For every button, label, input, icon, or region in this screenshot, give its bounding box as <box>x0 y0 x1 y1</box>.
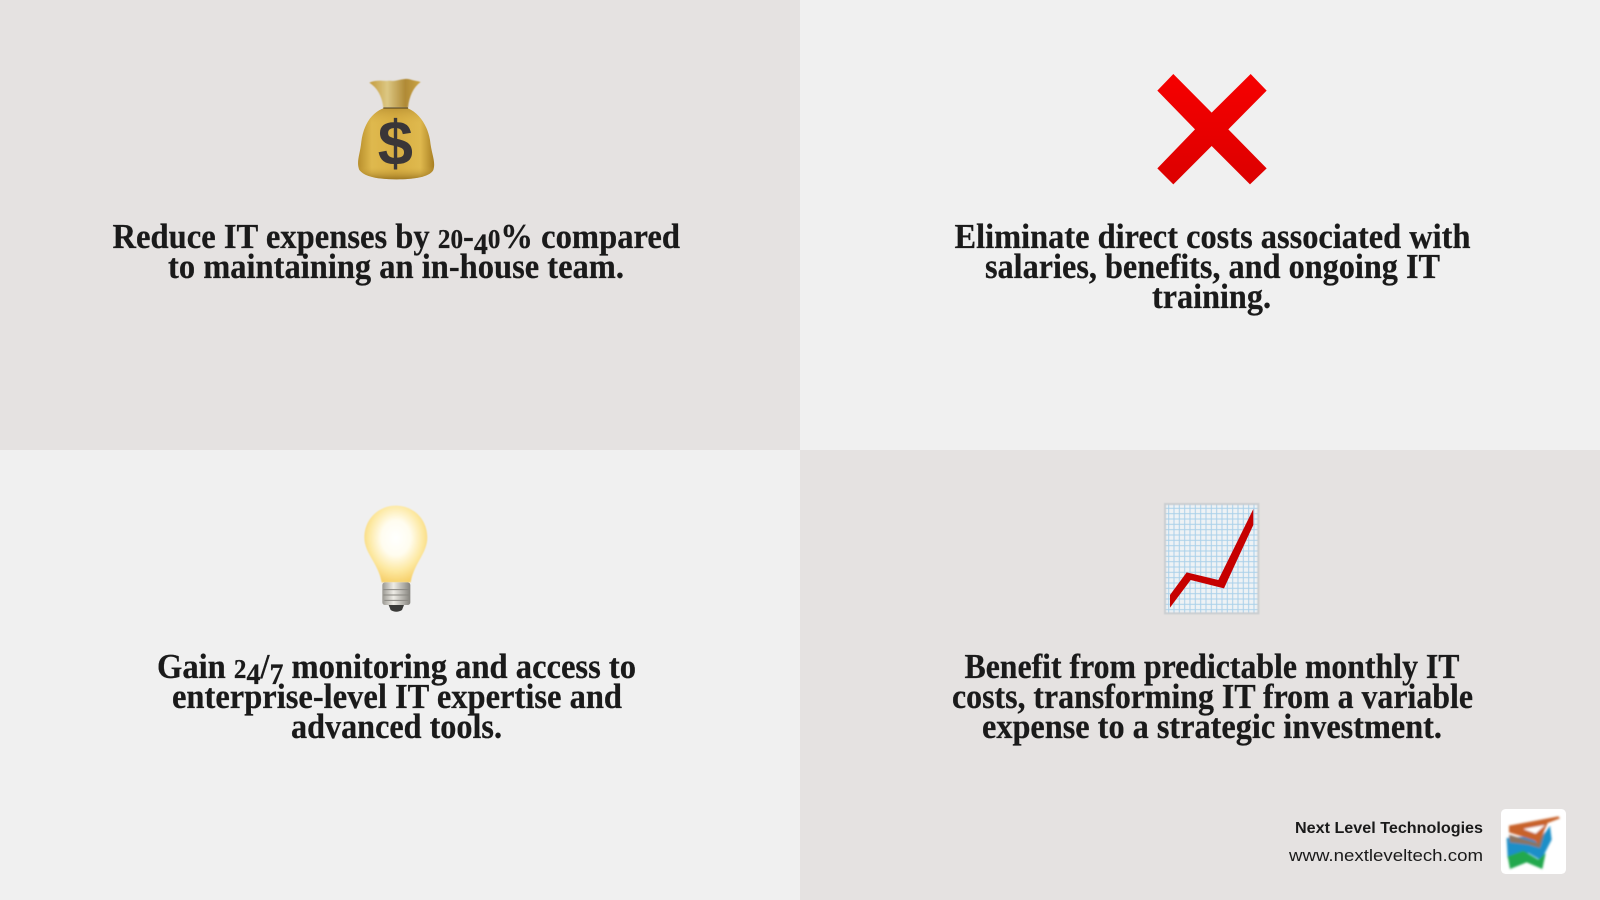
heading: monitoring text: / <box>259 647 271 686</box>
heading: predictable costs text <box>952 647 1473 746</box>
heading: monitoring text: advanced tools. <box>291 707 502 746</box>
heading: predictable costs text: expense to a strategic investment. <box>982 707 1442 746</box>
panel: predictable costs <box>800 450 1600 900</box>
heading: predictable costs text: costs, transforming IT from a variable <box>952 677 1473 716</box>
heading: reduce expenses text: 4 <box>474 228 488 261</box>
heading: reduce expenses text: 0 <box>488 224 500 254</box>
footer: company name and website: www.nextleveltech.com <box>1288 846 1483 865</box>
icon: rising chart <box>1165 504 1258 613</box>
heading: reduce expenses text <box>112 217 680 286</box>
heading: reduce expenses text: Reduce IT expenses by 20- <box>112 217 475 256</box>
heading: eliminate costs text: training. <box>1152 277 1271 316</box>
heading: reduce expenses text: to maintaining an in-house team. <box>168 247 624 286</box>
panel: monitoring and expertise <box>0 450 800 900</box>
heading: eliminate costs text <box>954 217 1470 316</box>
heading: reduce expenses text: % compared <box>500 217 693 256</box>
panel: reduce expenses <box>0 0 800 450</box>
heading: monitoring text: 4 <box>246 658 260 691</box>
heading: monitoring text <box>157 647 636 746</box>
heading: monitoring text: 7 <box>269 658 283 691</box>
heading: monitoring text: monitoring and access to <box>283 647 636 686</box>
heading: eliminate costs text: Eliminate direct costs associated with <box>954 217 1470 256</box>
heading: predictable costs text: Benefit from predictable monthly IT <box>964 647 1460 686</box>
panel: eliminate costs <box>800 0 1600 450</box>
icon: money bag: $ <box>378 109 413 179</box>
heading: monitoring text: Gain 2 <box>157 647 247 686</box>
icon: money bag <box>358 79 434 179</box>
logo: Next Level Technologies <box>1501 809 1566 874</box>
heading: monitoring text: enterprise-level IT expertise and <box>172 677 622 716</box>
icon: light bulb <box>364 506 427 612</box>
footer: company name and website <box>1288 820 1483 865</box>
icon: red cross <box>1157 74 1267 184</box>
heading: eliminate costs text: salaries, benefits, and ongoing IT <box>985 247 1440 286</box>
footer: company name and website: Next Level Technologies <box>1295 820 1483 837</box>
